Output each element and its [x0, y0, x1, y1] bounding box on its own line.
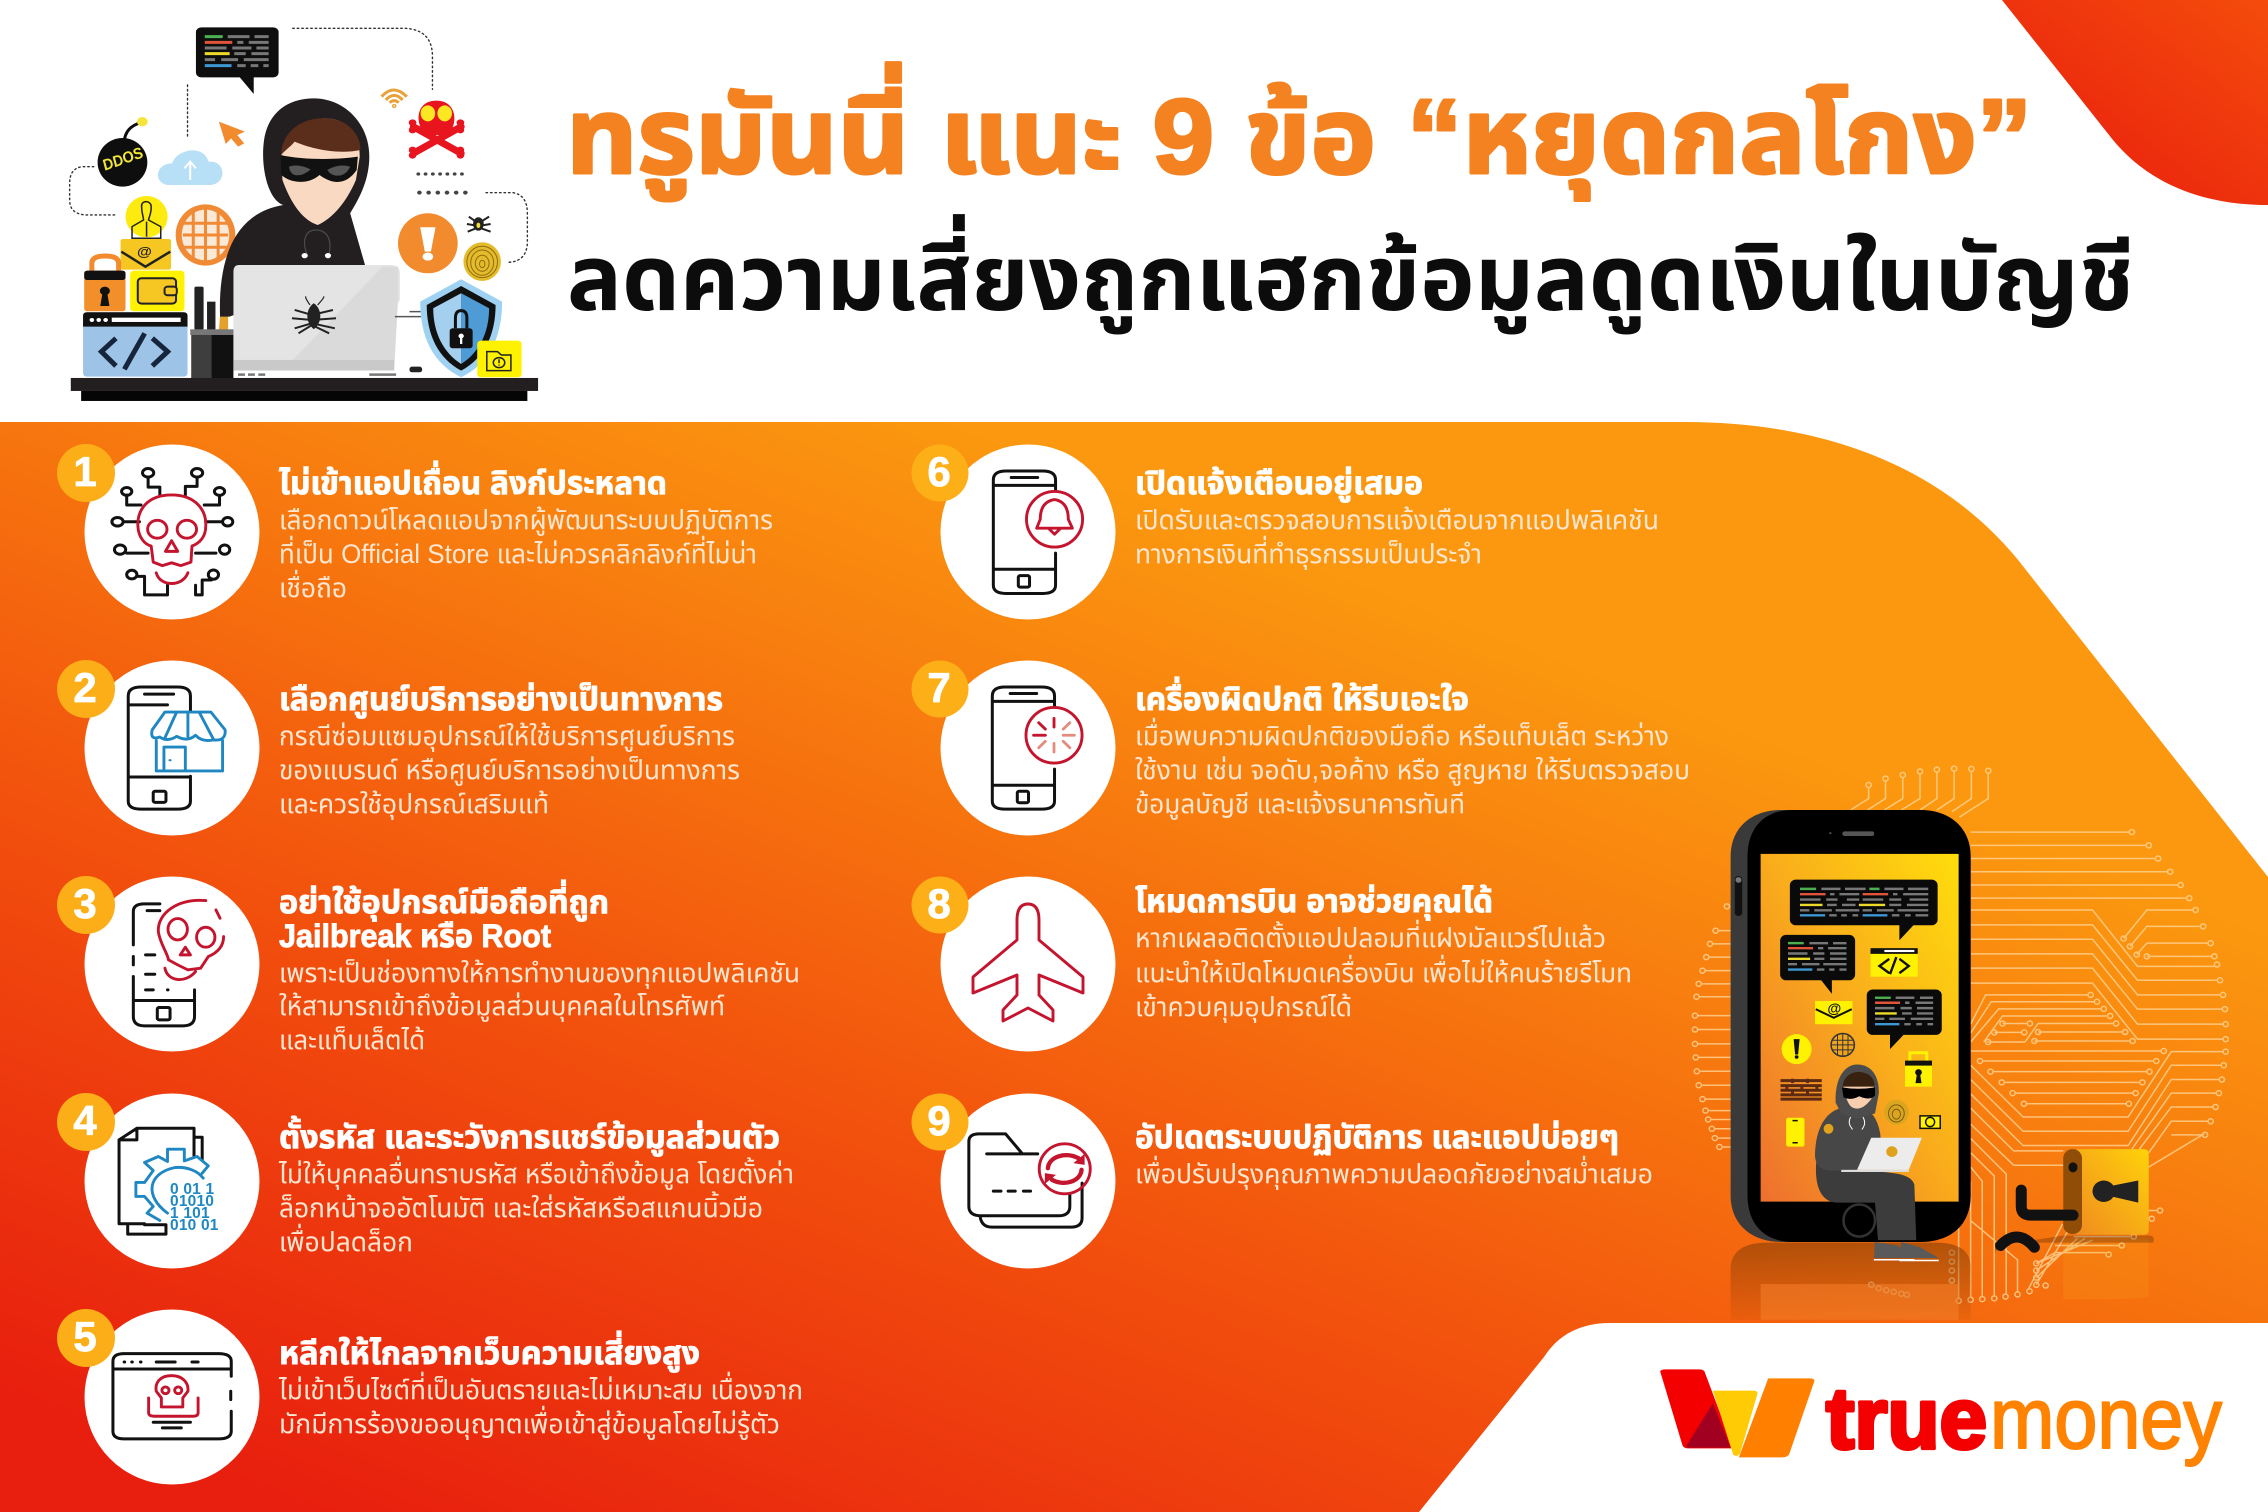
icon: pen holder	[190, 283, 234, 378]
heading 5: หลีกให้ไกลจากเว็บความเสี่ยงสูง	[279, 1330, 700, 1372]
password dots	[416, 172, 468, 195]
icon: envelope at	[121, 239, 171, 270]
icon: globe	[1831, 1033, 1854, 1056]
icon: lock	[1905, 1053, 1932, 1087]
icon: envelope: @	[1827, 1000, 1841, 1016]
body 6: ทางการเงินที่ทำธุรกรรมเป็นประจำ	[1135, 535, 1482, 570]
phone body	[1731, 810, 1971, 1242]
icon: fingerprint	[463, 242, 501, 281]
icon: globe	[176, 204, 235, 266]
body 9: เพื่อปรับปรุงคุณภาพความปลอดภัยอย่างสม่ำเสมอ	[1135, 1155, 1653, 1190]
icon: document gear binary: 1 101	[170, 1205, 210, 1222]
body 4: เพื่อปลดล็อก	[279, 1223, 413, 1257]
body 6	[1135, 505, 1659, 570]
icon: document gear binary: 0 01 1	[170, 1181, 214, 1198]
heading 3: อย่าใช้อุปกรณ์มือถือที่ถูก	[279, 879, 609, 921]
icon: document gear binary: 01010	[170, 1193, 214, 1210]
panel: logo area white	[1419, 1323, 2268, 1512]
icon: circuit skull	[112, 469, 233, 595]
body 1: ที่เป็น Official Store และไม่ควรคลิกลิงก์ที่ไม่น่า	[279, 535, 757, 569]
icon circle 1	[84, 444, 260, 620]
icon: code tag	[1870, 948, 1918, 977]
body 8: หากเผลอติดตั้งแอปปลอมที่แฝงมัลแวร์ไปแล้ว	[1135, 919, 1606, 953]
body 7: ใช้งาน เช่น จอดับ,จอค้าง หรือ สูญหาย ให้รีบตรวจสอบ	[1135, 755, 1690, 786]
body 4: ไม่ให้บุคคลอื่นทราบรหัส หรือเข้าถึงข้อมูล โดยตั้งค่า	[278, 1155, 794, 1190]
heading 1: ไม่เข้าแอปเถื่อน ลิงก์ประหลาด	[279, 460, 667, 501]
heading 9: อัปเดตระบบปฏิบัติการ และแอปบ่อยๆ	[1135, 1119, 1619, 1155]
badge 8: 8	[927, 880, 951, 927]
badge 6	[912, 444, 968, 502]
body 1	[279, 505, 773, 603]
icon circle 6	[940, 444, 1116, 620]
hacker sitting	[1815, 1065, 1939, 1261]
badge 5: 5	[73, 1313, 97, 1360]
body 3: และแท็บเล็ตได้	[279, 1025, 425, 1055]
reflection below phone	[1731, 1243, 1971, 1320]
body 3	[279, 958, 800, 1055]
icon: envelope at: @	[137, 245, 152, 260]
body 5: มักมีการร้องขออนุญาตเพื่อเข้าสู่ข้อมูลโดยไม่รู้ตัว	[279, 1405, 780, 1440]
panel: orange gradient background	[0, 422, 2268, 1512]
icon: folder sync	[969, 1134, 1090, 1227]
badge 7: 7	[927, 664, 951, 711]
title: line 1: ทรูมันนี่ แนะ 9 ข้อ “หยุดกลโกง”	[566, 63, 2032, 201]
icon: phone loading	[992, 687, 1082, 809]
tip 7	[912, 660, 1690, 836]
icon: cloud upload	[158, 150, 222, 185]
icon: document gear binary: 010 01	[170, 1217, 219, 1234]
hacker figure	[220, 98, 369, 317]
body 2	[279, 721, 740, 820]
logo mark	[1660, 1369, 1814, 1457]
icon circle 7	[940, 660, 1116, 836]
badge 8	[912, 876, 968, 934]
code bubble left	[1780, 935, 1855, 994]
body 8: เข้าควบคุมอุปกรณ์ได้	[1135, 992, 1352, 1023]
reflection: phone screen	[1761, 1284, 1959, 1320]
body 2: ของแบรนด์ หรือศูนย์บริการอย่างเป็นทางการ	[279, 755, 740, 786]
icon: code speech bubble	[196, 27, 279, 94]
tip 9	[912, 1094, 1653, 1268]
icon: envelope	[1815, 1000, 1852, 1024]
icon: orange padlock	[84, 256, 126, 311]
heading 3: Jailbreak หรือ Root	[279, 918, 551, 954]
tip 3	[57, 876, 800, 1055]
tip 8	[912, 876, 1632, 1052]
icon: phone bell	[993, 471, 1083, 594]
reflection: lock	[2063, 1238, 2149, 1299]
icon: shield lock	[420, 279, 502, 377]
logo text money: money	[1990, 1371, 2222, 1467]
heading 4: ตั้งรหัส และระวังการแชร์ข้อมูลส่วนตัว	[279, 1115, 780, 1156]
tip 2	[57, 660, 740, 836]
body 8: แนะนำให้เปิดโหมดเครื่องบิน เพื่อไม่ให้คนร้ายรีโมท	[1135, 954, 1632, 988]
icon: exclamation	[1782, 1034, 1812, 1064]
tip 6	[912, 444, 1659, 620]
icon: DDOS bomb	[98, 117, 148, 187]
icon: banknote	[1920, 1116, 1940, 1128]
badge 4	[57, 1093, 115, 1151]
body 1: เชื่อถือ	[279, 569, 347, 603]
icon: document gear binary	[119, 1128, 219, 1234]
body 2: กรณีซ่อมแซมอุปกรณ์ให้ใช้บริการศูนย์บริการ	[279, 721, 735, 752]
heading 2: เลือกศูนย์บริการอย่างเป็นทางการ	[279, 681, 723, 718]
body 6: เปิดรับและตรวจสอบการแจ้งเตือนจากแอปพลิเคชัน	[1135, 505, 1659, 535]
icon: orange cursor	[219, 122, 245, 147]
badge 9	[912, 1094, 968, 1150]
body 5: ไม่เข้าเว็บไซต์ที่เป็นอันตรายและไม่เหมาะสม เนื่องจาก	[278, 1371, 803, 1405]
circuit board background	[1692, 766, 2228, 1303]
badge 1: 1	[73, 448, 97, 495]
code bubble right	[1867, 990, 1942, 1049]
badge 3	[57, 876, 115, 934]
logo text true: true	[1826, 1371, 1987, 1467]
icon circle 9	[940, 1094, 1116, 1268]
body 7	[1135, 717, 1690, 820]
heading 8: โหมดการบิน อาจช่วยคุณได้	[1135, 883, 1493, 920]
badge 2: 2	[73, 664, 97, 711]
desk	[71, 378, 538, 401]
body 3: เพราะเป็นช่องทางให้การทำงานของทุกแอปพลิเคชัน	[279, 958, 800, 989]
tip 5	[57, 1309, 803, 1484]
icon: yellow folder	[477, 341, 522, 377]
icon: code window	[83, 312, 188, 377]
icon: wifi	[382, 90, 407, 107]
padlock with broken handle	[1995, 1149, 2154, 1253]
illustration: phone with hacker	[1731, 810, 2154, 1320]
icon circle 5	[84, 1310, 260, 1484]
icon circle 4	[84, 1094, 260, 1268]
badge 3: 3	[73, 880, 97, 927]
icon: bricks	[1780, 1079, 1822, 1099]
badge 2	[57, 660, 115, 718]
badge 5	[57, 1309, 115, 1367]
icon circle 2	[84, 660, 260, 836]
body 3: ให้สามารถเข้าถึงข้อมูลส่วนบุคคลในโทรศัพท์	[279, 991, 725, 1022]
icon: small spider	[467, 217, 491, 232]
heading 6: เปิดแจ้งเตือนอยู่เสมอ	[1135, 465, 1423, 502]
icon: small phone	[1786, 1118, 1804, 1147]
body 5	[278, 1371, 803, 1440]
body 7: ข้อมูลบัญชี และแจ้งธนาคารทันที	[1135, 789, 1465, 820]
icon: browser skull	[113, 1354, 231, 1439]
body 1: เลือกดาวน์โหลดแอปจากผู้พัฒนาระบบปฏิบัติการ	[279, 505, 773, 536]
heading 7: เครื่องผิดปกติ ให้รีบเอะใจ	[1135, 676, 1469, 717]
title: line 2: ลดความเสี่ยงถูกแฮกข้อมูลดูดเงินในบัญชี	[567, 214, 2134, 335]
badge 9: 9	[927, 1097, 951, 1144]
tip 1	[57, 444, 773, 620]
body 7: เมื่อพบความผิดปกติของมือถือ หรือแท็บเล็ต ระหว่าง	[1135, 717, 1669, 751]
body 4	[278, 1155, 794, 1257]
badge 1	[57, 444, 115, 502]
heading 3	[279, 879, 609, 954]
icon: exclamation circle	[398, 213, 458, 273]
badge 7	[912, 660, 968, 718]
dotted connector lines	[70, 28, 527, 262]
icon: wallet	[130, 271, 184, 311]
icon circle 3	[84, 876, 260, 1052]
body 2: และควรใช้อุปกรณ์เสริมแท้	[279, 789, 549, 820]
tip 4	[57, 1093, 794, 1268]
badge 6: 6	[927, 448, 951, 495]
laptop with spider	[233, 265, 422, 378]
decorative red corner	[2002, 0, 2268, 205]
icon: DDOS bomb: DDOS	[100, 144, 146, 174]
code bubble top	[1790, 880, 1938, 940]
icon: skull and crossbones	[409, 101, 464, 159]
icon: airplane	[973, 904, 1083, 1021]
icon: phone with skull	[133, 900, 224, 1026]
icon circle 8	[940, 876, 1116, 1052]
icon: fingerprint	[1884, 1100, 1909, 1125]
icon: yellow user circle	[126, 196, 168, 238]
badge 4: 4	[73, 1097, 97, 1144]
logo: truemoney	[1660, 1369, 2222, 1467]
body 4: ล็อกหน้าจออัตโนมัติ และใส่รหัสหรือสแกนนิ้วมือ	[279, 1191, 763, 1223]
icon: phone store	[128, 687, 225, 809]
illustration: hacker at desk	[70, 27, 538, 401]
body 8	[1135, 919, 1632, 1023]
